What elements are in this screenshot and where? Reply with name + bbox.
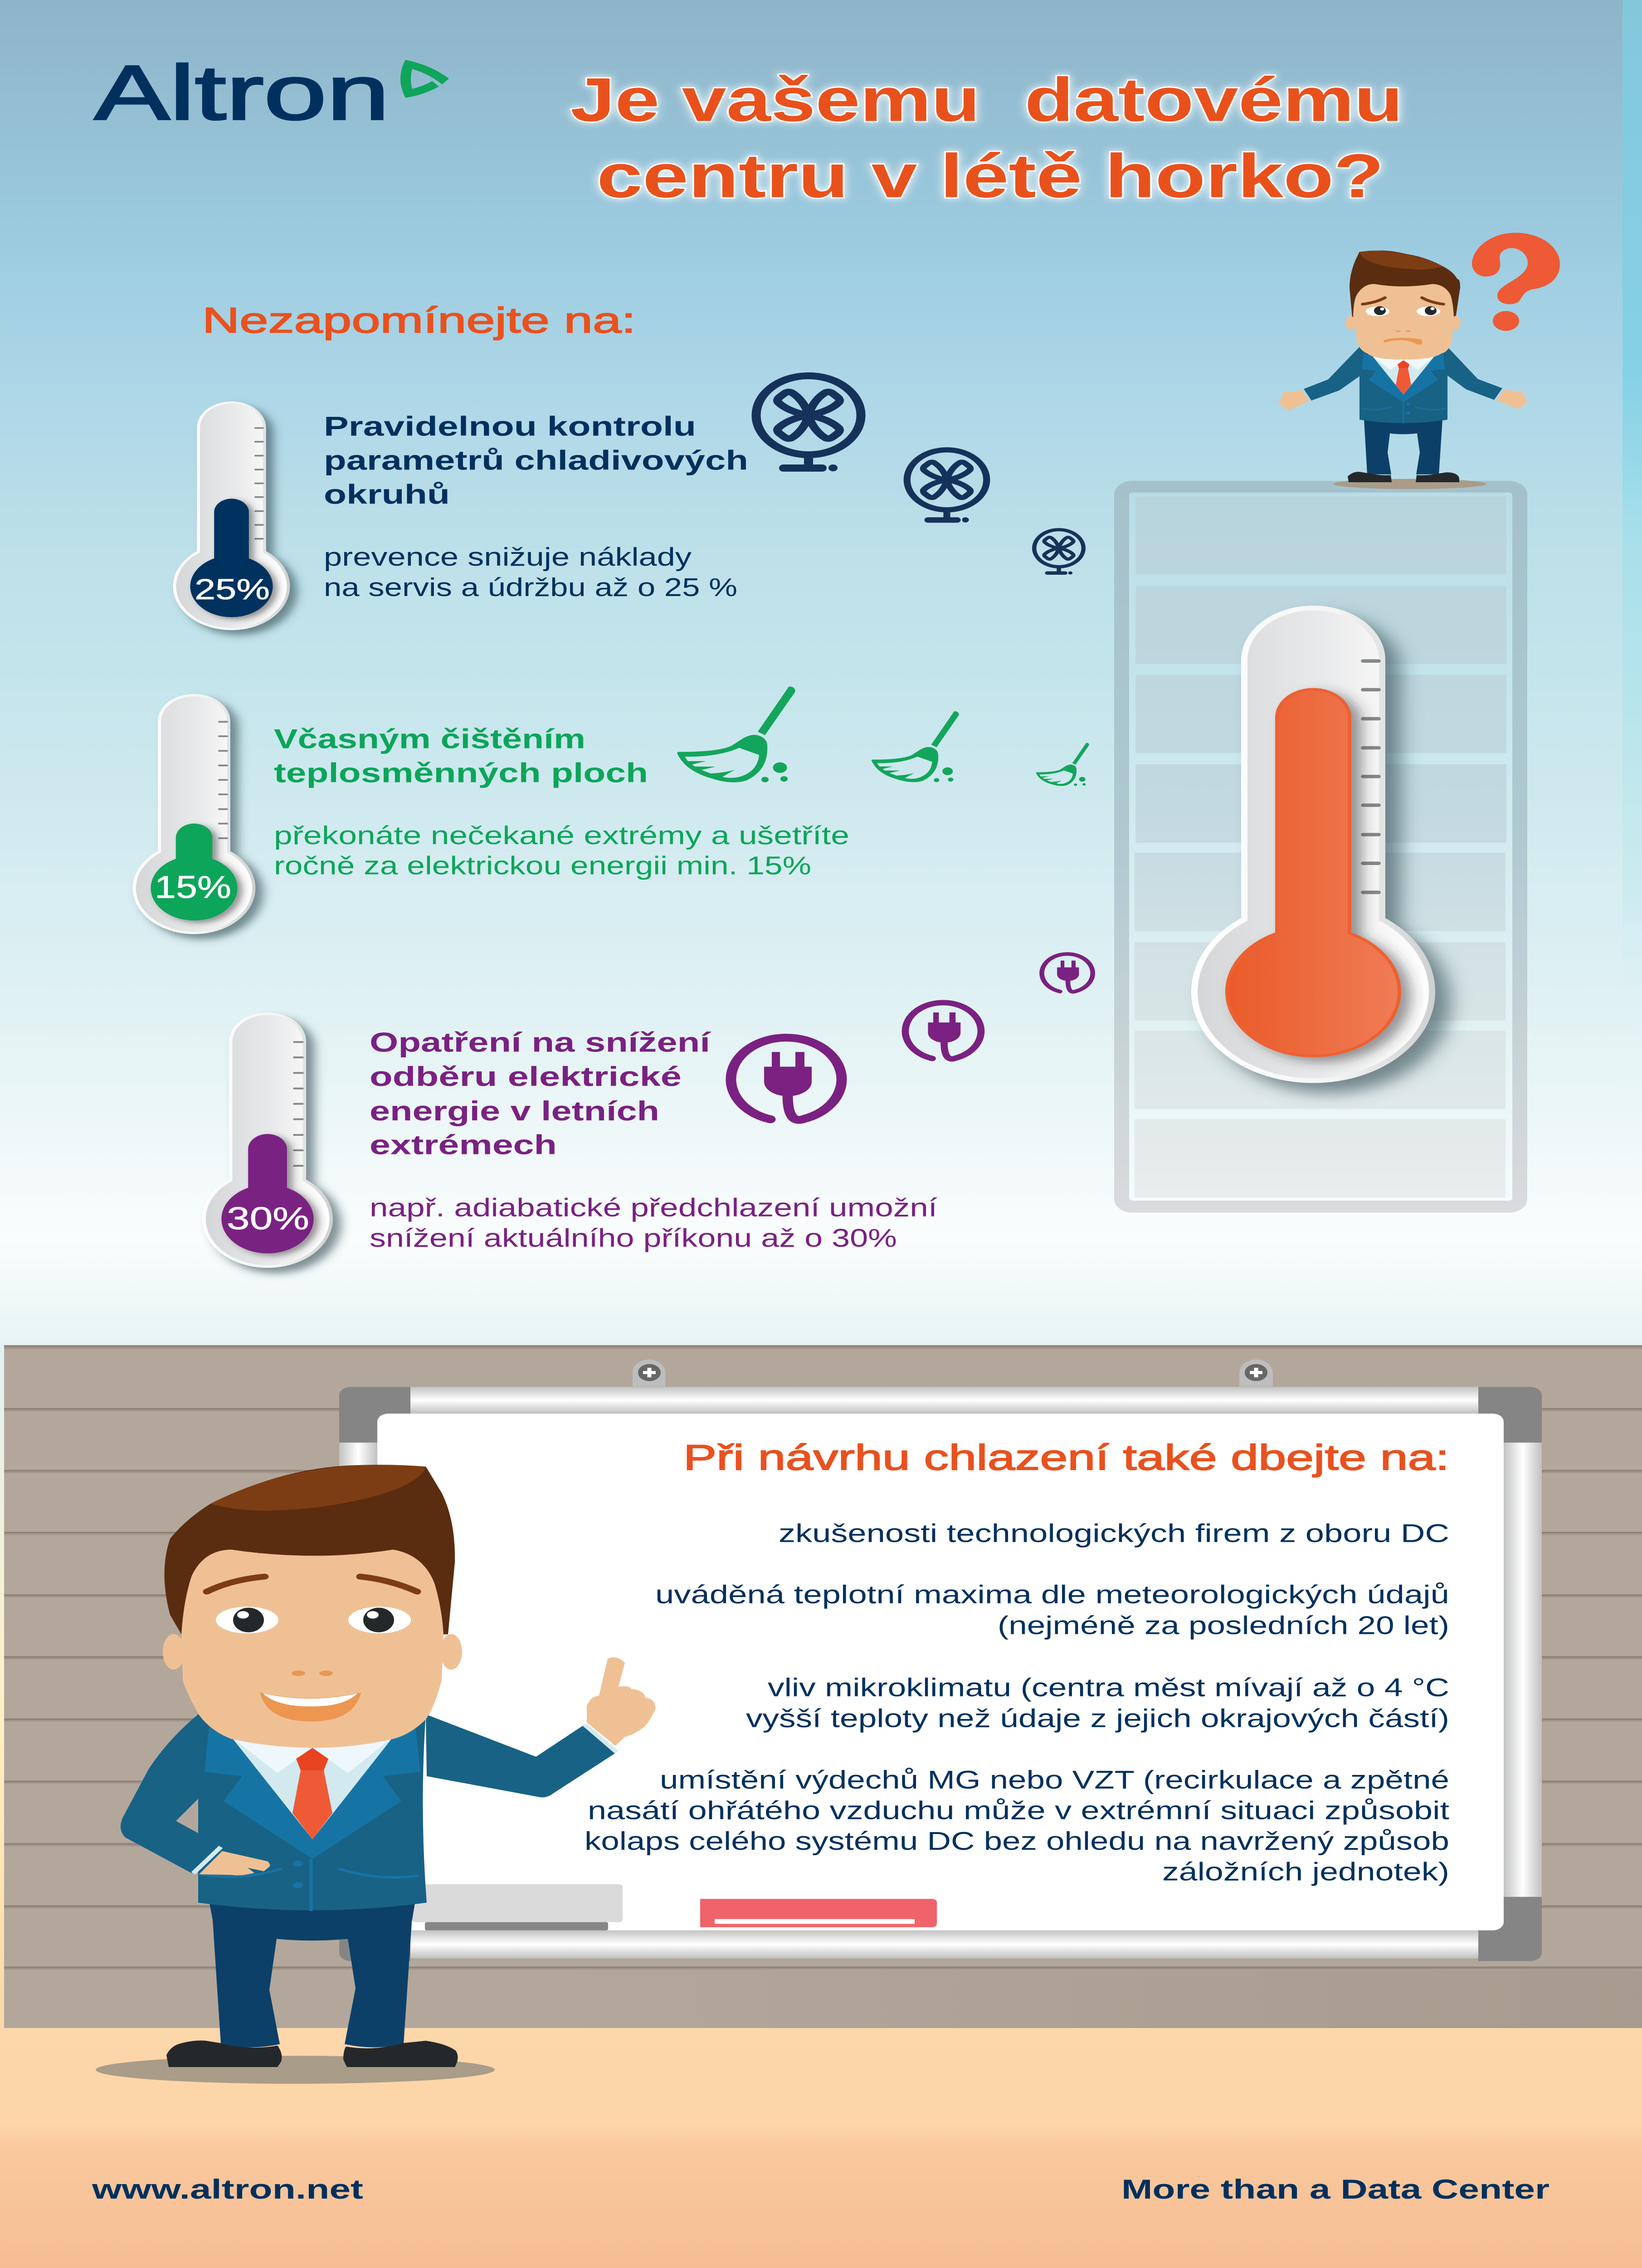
- thermometer: 25%: 25%: [195, 573, 270, 605]
- text block: Pravidelnou kontrolu: Pravidelnou kontrolu: [324, 411, 696, 442]
- footer: website: www.altron.net: [92, 2174, 363, 2205]
- ears: [163, 1634, 185, 1670]
- hooks: [633, 1359, 1273, 1387]
- text block: Opatření na snížení: např. adiabatické předchlazení umožní: [370, 1193, 938, 1222]
- shirt: [231, 1739, 393, 1839]
- whiteboard list: vliv mikroklimatu (centra měst mívají až o 4 °C: [768, 1673, 1449, 1702]
- right edge strip: [1623, 0, 1642, 1094]
- thermometer: 15%: 15%: [155, 870, 231, 905]
- eraser: [412, 1884, 623, 1922]
- smile: [260, 1692, 361, 1721]
- corners: [339, 1387, 1542, 1961]
- footer: tagline: More than a Data Center: [1121, 2174, 1549, 2205]
- icon: medium fan: [907, 450, 987, 523]
- icon: large broom: [677, 687, 795, 782]
- icon: medium plug: [905, 1002, 981, 1059]
- hair: [1350, 250, 1460, 318]
- board surface: [377, 1413, 1504, 1931]
- text block: Včasným čištěním: teplosměnných ploch: [274, 758, 648, 788]
- eyebrows: [1363, 298, 1443, 304]
- title: [570, 65, 1403, 210]
- text block: Včasným čištěním: Včasným čištěním: [274, 724, 585, 754]
- icon: medium broom: [872, 711, 959, 782]
- text block: Pravidelnou kontrolu: okruhů: [324, 479, 450, 510]
- icon: small plug: [1042, 954, 1093, 992]
- trousers: [210, 1903, 415, 2048]
- large thermometer: [1194, 608, 1432, 1080]
- lapels: [1362, 353, 1445, 402]
- nose and mouth: [1395, 330, 1401, 332]
- presenting man: [96, 1465, 656, 2084]
- red marker: [700, 1899, 937, 1927]
- eyes: [1366, 307, 1389, 316]
- whiteboard heading: Při návrhu chlazení také dbejte na:: [683, 1437, 1449, 1477]
- right arm: [426, 1714, 617, 1797]
- whiteboard: [339, 1359, 1542, 1961]
- text block: Opatření na snížení: snížení aktuálního příkonu až o 30%: [370, 1224, 897, 1252]
- logo: Altron: Altron: [94, 50, 390, 136]
- wall: [0, 1345, 1642, 2029]
- tie: [292, 1770, 332, 1839]
- whiteboard list: uváděná teplotní maxima dle meteorologických údajů: [655, 1580, 1449, 1609]
- frame rails: [410, 1387, 1478, 1413]
- icon: large plug: [731, 1038, 842, 1120]
- text block: Pravidelnou kontrolu: na servis a údržbu až o 25 %: [324, 573, 737, 602]
- text block: Pravidelnou kontrolu: [324, 411, 748, 602]
- text block: Opatření na snížení: Opatření na snížení: [370, 1027, 711, 1058]
- shoes: [166, 2041, 458, 2067]
- jacket body: [198, 1714, 427, 1910]
- trousers: [1364, 420, 1442, 474]
- eyes: [216, 1607, 278, 1633]
- hair: [164, 1465, 455, 1634]
- icon: large fan: [756, 376, 861, 472]
- thermometer: 25%: [175, 403, 288, 629]
- heading: Nezapomínejte na: Nezapomínejte na:: [202, 300, 636, 340]
- thermometer: 30%: 30%: [227, 1201, 309, 1237]
- pockets and buttons: [1363, 402, 1446, 423]
- face: [181, 1549, 443, 1748]
- whiteboard list: nasátí ohřátého vzduchu může v extrémní situaci způsobit: [588, 1796, 1449, 1825]
- thermometer: 30%: [204, 1014, 331, 1266]
- whiteboard list: (nejméně za posledních 20 let): [998, 1611, 1449, 1640]
- hands: [1278, 390, 1528, 410]
- lapels: [205, 1726, 420, 1859]
- jacket body: [1359, 347, 1447, 423]
- shadow under feet: [1333, 479, 1486, 489]
- shoes: [1348, 472, 1459, 482]
- text block: Opatření na snížení: odběru elektrické: [370, 1061, 682, 1092]
- pockets and buttons: [201, 1859, 419, 1911]
- whiteboard list: zkušenosti technologických firem z oboru DC: [779, 1519, 1449, 1548]
- sky background: [0, 0, 1642, 1347]
- eyebrows: [207, 1577, 417, 1592]
- text block: Včasným čištěním: překonáte nečekané extrémy a ušetříte: [274, 821, 849, 850]
- icon: small broom: [1036, 743, 1089, 786]
- text block: Opatření na snížení: [370, 1027, 938, 1252]
- text block: Pravidelnou kontrolu: prevence snižuje náklady: [324, 543, 692, 572]
- shirt: [1373, 357, 1434, 395]
- text block: Pravidelnou kontrolu: parametrů chladivových: [324, 445, 748, 476]
- ears: [1346, 316, 1355, 330]
- title: centru v létě horko?: [597, 141, 1384, 210]
- whiteboard list: umístění výdechů MG nebo VZT (recirkulace a zpětné: [660, 1766, 1449, 1794]
- whiteboard list: záložních jednotek): [1162, 1857, 1449, 1886]
- whiteboard list: vyšší teploty než údaje z jejich okrajových částí): [746, 1704, 1449, 1733]
- whiteboard list: [585, 1519, 1449, 1886]
- tie: [1396, 368, 1411, 395]
- text block: Včasným čištěním: ročně za elektrickou energii min. 15%: [274, 851, 811, 880]
- question mark: [1472, 233, 1560, 331]
- shadow under feet: [96, 2056, 495, 2084]
- title: Je vašemu datovému: [570, 65, 1403, 134]
- icon: small fan: [1034, 530, 1083, 575]
- server rack: [1114, 481, 1527, 1212]
- arms: [1304, 347, 1502, 401]
- floor: [0, 2028, 1642, 2268]
- text block: Opatření na snížení: extrémech: [370, 1130, 557, 1160]
- text block: Včasným čištěním: [274, 724, 849, 880]
- nose: [292, 1671, 305, 1676]
- resting hand: [199, 1851, 270, 1875]
- face: [1353, 284, 1454, 360]
- left arm: [121, 1714, 219, 1873]
- pointing hand: [587, 1657, 656, 1746]
- worried man on rack: [1278, 250, 1528, 489]
- thermometer: 15%: [134, 695, 254, 933]
- whiteboard list: kolaps celého systému DC bez ohledu na navržený způsob: [585, 1827, 1449, 1856]
- text block: Opatření na snížení: energie v letních: [370, 1096, 659, 1126]
